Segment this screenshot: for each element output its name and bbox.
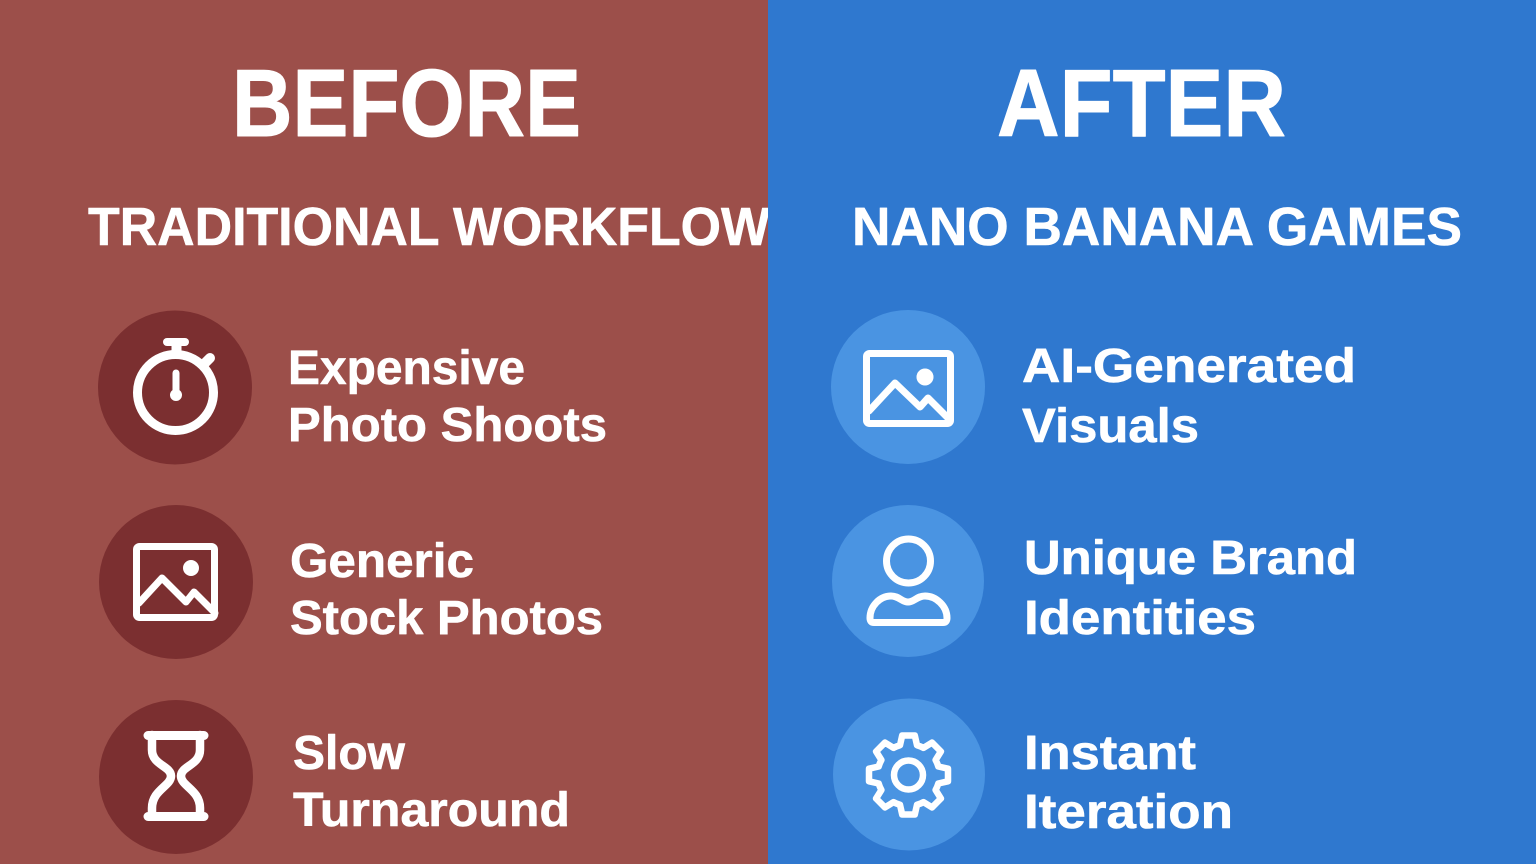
heading: after: AFTER [997, 50, 1286, 157]
text: expensive photo shoots: Expensive [288, 342, 525, 395]
icon: stopwatch [98, 310, 252, 464]
item: unique brand identities [832, 505, 1357, 657]
icon: image [99, 505, 253, 659]
panel: before [0, 0, 770, 864]
icon: hourglass [99, 700, 253, 854]
text: slow turnaround [293, 727, 570, 837]
text: expensive photo shoots [288, 342, 607, 452]
icon: person [832, 505, 984, 657]
icon: gear [833, 698, 985, 850]
item: ai-generated visuals [831, 310, 1356, 464]
text: slow turnaround: Slow [293, 727, 406, 780]
item: generic stock photos [99, 505, 603, 659]
text: unique brand identities: Identities [1024, 592, 1256, 645]
text: generic stock photos: Stock Photos [290, 592, 603, 645]
panel: after [768, 0, 1536, 864]
text: expensive photo shoots: Photo Shoots [288, 399, 607, 452]
text: generic stock photos: Generic [290, 535, 474, 588]
text: unique brand identities: Unique Brand [1024, 532, 1357, 585]
text: ai-generated visuals [1022, 340, 1356, 453]
item: instant iteration [833, 698, 1233, 850]
text: instant iteration: Instant [1024, 727, 1196, 780]
text: instant iteration [1024, 727, 1233, 839]
text: generic stock photos [290, 535, 603, 645]
subheading: traditional workflow: TRADITIONAL WORKFLOW [88, 197, 770, 257]
text: slow turnaround: Turnaround [293, 784, 570, 837]
text: instant iteration: Iteration [1024, 786, 1233, 839]
icon: image [831, 310, 985, 464]
item: expensive photo shoots [98, 310, 607, 464]
item: slow turnaround [99, 700, 570, 854]
heading: before: BEFORE [232, 50, 581, 157]
subheading: nano banana games: NANO BANANA GAMES [852, 197, 1462, 257]
text: unique brand identities [1024, 532, 1357, 645]
text: ai-generated visuals: Visuals [1022, 400, 1199, 453]
text: ai-generated visuals: AI-Generated [1022, 340, 1356, 393]
